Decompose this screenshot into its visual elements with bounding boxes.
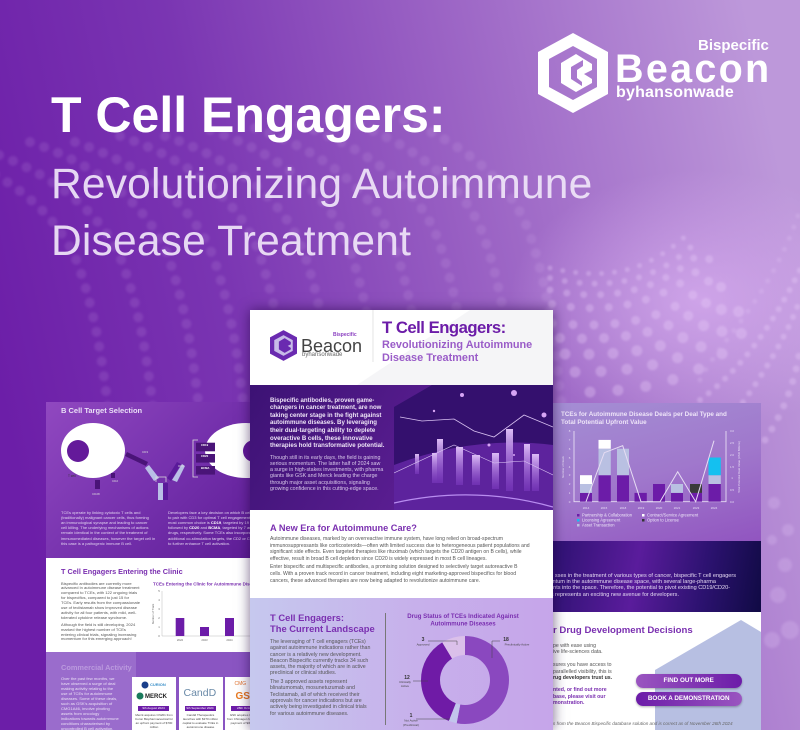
- heading: The Current Landscape: [270, 622, 375, 634]
- text: rug developers trust us. nted, or find out more: [553, 675, 612, 693]
- stacked bar chart with line: 0.0: [730, 500, 734, 504]
- logo: Bispecific Beacon by hansonwade: byhansonwade: [616, 84, 734, 101]
- stacked bar chart with line: 0: [569, 500, 571, 504]
- text: marked the highest number of TCEs: [61, 627, 126, 632]
- lead text: changers in cancer treatment, are now: [270, 404, 381, 411]
- panel: B cell target selection: [46, 402, 252, 558]
- text: preclinical or clinical studies. The 3 approved assets represent: [270, 670, 347, 685]
- panel: B cell target selection: CD3: [142, 450, 148, 454]
- bar chart: 0: [158, 634, 160, 638]
- subtitle: Disease Treatment: [382, 352, 478, 364]
- text: Teclistamab, all of which received their: [270, 692, 360, 698]
- panel: B cell target selection: CD28: [92, 492, 100, 496]
- panel: deals chart: [553, 403, 761, 541]
- body text: Though still in its early days, the field is gaining: [270, 454, 380, 460]
- icon: hexagon: [270, 330, 297, 361]
- panel: B cell target selection: CD20: [201, 454, 208, 458]
- body text: serious momentum. The latter half of 2024 saw: [270, 461, 380, 467]
- subtitle: [382, 339, 532, 364]
- deal card 1: Merck acquires CN201 from Curon Biopharmaceutical for an upfront payment of $700 million: [135, 712, 173, 728]
- logo: Bispecific: [333, 332, 357, 338]
- text: use of teclistamab show improved disease: [61, 605, 137, 610]
- hexagon decoration: [655, 620, 761, 730]
- stacked bar chart with line: Partnership & Collaboration: [582, 512, 633, 518]
- text: for various autoimmune diseases.: [270, 711, 348, 717]
- labels: T cell: [68, 474, 76, 478]
- stacked bar chart with line: 2.5: [730, 441, 734, 445]
- text: momentum for this emerging approach!: [61, 636, 132, 641]
- stacked bar chart with line: Total Potential Deal Value (USD Billions): [737, 441, 741, 493]
- callouts: [413, 641, 500, 719]
- panel: current landscape: [250, 598, 553, 730]
- text: diseases. Some of these deals,: [61, 696, 117, 700]
- deal card 1: [132, 677, 176, 730]
- panel: B cell target selection: CD19: [201, 442, 208, 446]
- subtitle: Revolutionizing Autoimmune: [51, 160, 592, 208]
- lead text: their dual-targeting ability to deplete: [270, 427, 375, 434]
- text: actively being investigated in clinical trials: [270, 704, 367, 710]
- logo: byhansonwade: [302, 352, 342, 358]
- document page: left: [46, 402, 252, 730]
- bar chart: 2022: [177, 638, 184, 642]
- wordmark: Bispecific: [698, 36, 769, 54]
- donut chart: drug status: 18: [503, 637, 509, 643]
- bar chart: 3: [158, 607, 160, 611]
- logo: Beacon: [301, 336, 362, 356]
- stacked bar chart with line: 3.0: [730, 429, 734, 433]
- donut chart: drug status: 12: [404, 675, 410, 681]
- document page: right: [553, 403, 761, 730]
- lead text: autoimmune diseases. By leveraging: [270, 419, 377, 426]
- button: book a demonstration: [636, 692, 742, 706]
- chart heading: Total Potential Upfront Value: [561, 418, 647, 426]
- stacked bar chart with line: 1: [569, 491, 571, 495]
- stacked bar chart with line: 6: [569, 447, 571, 451]
- text column 1: cell killing. The underlying mechanisms of actions: [61, 525, 149, 530]
- text: approvals for cancer indications but are: [270, 698, 362, 704]
- text: TCEs. Early results from the compassionate: [61, 600, 140, 605]
- title: T Cell Engagers:: [51, 87, 446, 143]
- logo: [270, 330, 362, 361]
- subtitle: Revolutionizing Autoimmune: [382, 339, 532, 351]
- text: conditions characterised by: [61, 720, 110, 726]
- icon: hexagon B mark: [538, 33, 608, 113]
- stacked bar chart with line: 2023: [693, 506, 700, 510]
- bar chart: [151, 582, 252, 642]
- bar chart: 1: [158, 625, 160, 629]
- donut chart: drug status: (Preclinical): [403, 723, 419, 727]
- footnote: s from the Beacon Bispecific database solution and is correct as of November 26th 2024: [553, 720, 733, 726]
- donut chart: drug status: Active: [401, 684, 409, 688]
- stacked bar chart with line: Asset Transaction: [582, 522, 615, 528]
- text: indications towards autoimmune: [61, 716, 119, 720]
- stacked bar chart with line: 2018: [620, 506, 627, 510]
- text: compared to TCEs, with 122 ongoing trials: [61, 590, 137, 595]
- donut chart: drug status: [399, 613, 530, 727]
- bar chart: 5: [158, 589, 160, 593]
- bar chart: Number of Trials: [151, 603, 155, 624]
- panel: dark image band: [553, 541, 761, 612]
- deal card 1: 9th August 2024: [142, 706, 165, 710]
- text: monstration.: [553, 700, 584, 706]
- bar chart: 2023: [201, 638, 208, 642]
- text: pe with ease using: [553, 643, 596, 649]
- bar chart: 2: [158, 616, 160, 620]
- stacked bar chart with line: 2015: [601, 506, 608, 510]
- body text: through major asset acquisitions, signaling: [270, 480, 370, 486]
- text: Beacon Bispecific currently tracks 34 such: [270, 658, 368, 664]
- text: base, please visit our: [553, 694, 605, 700]
- text column 2: drugs, respectively. Some TCEs also incorporate: [168, 530, 252, 535]
- paragraphs: Autoimmune diseases, marked by an overreactive immune system, have long relied on broad-spectrum: [270, 536, 503, 542]
- heading: T Cell Engagers Entering the Clinic: [61, 567, 183, 576]
- panel: dark image band: ntum in the autoimmune disease space, with several large-pharma: [553, 579, 716, 585]
- panel: a new era: [250, 510, 553, 598]
- panel: dark image band: ents into the space. Therefore, the potential to pivot existing CD19/CD20-: [553, 585, 730, 591]
- body text: giants like GSK and Merck leading the charge: [270, 473, 377, 479]
- text column 1: remain identical in the context of the treatment of: [61, 530, 148, 535]
- text: for bispecifics, compared to just 15 for: [61, 595, 129, 600]
- stacked bar chart with line: 2021: [674, 506, 681, 510]
- subtitle: [51, 160, 592, 264]
- stacked bar chart with line: 1: [731, 476, 733, 480]
- text: ive life-sciences data. sures you have access to: [553, 649, 612, 668]
- text: parallelled visibility, this is: [553, 669, 612, 675]
- paragraphs: [270, 536, 530, 584]
- text column 1: this case is a pathogenic immune B cell.: [61, 541, 132, 546]
- text column 1: (traditionally) malignant cancer cells, thus forming: [61, 515, 149, 520]
- text: entering clinical trials, signaling increasing: [61, 632, 136, 637]
- stacked bar chart with line: 2020: [656, 506, 663, 510]
- text column 2: [168, 510, 252, 546]
- deal card 3: [224, 677, 268, 730]
- lead text: [270, 396, 384, 449]
- donut chart: drug status: Preclinically Active: [505, 642, 530, 646]
- body text: a surge in high-stakes investments, with pharma: [270, 467, 383, 473]
- stacked bar chart with line: 1.5: [730, 465, 734, 469]
- donut chart: drug status: 1: [410, 713, 413, 719]
- lead text: therapies hold transformative potential.: [270, 442, 384, 449]
- text: advanced in autoimmune disease treatment: [61, 585, 140, 590]
- deal card 2: Candid Therapeutics launches with $370 million capital to evaluate TCEs in autoimmune disease: [183, 712, 218, 728]
- donut chart: drug status: Clinically: [399, 680, 411, 684]
- donut chart: drug status: Not Active: [404, 718, 418, 722]
- heading: [270, 612, 375, 634]
- deal card 1: CURION: [150, 682, 166, 687]
- deal card 2: [178, 677, 222, 730]
- donut chart: drug status: 3: [422, 637, 425, 643]
- segments: [430, 646, 500, 714]
- text: [553, 643, 612, 706]
- stacked bar chart with line: 3: [569, 473, 571, 477]
- chart title: Drug Status of TCEs Indicated Against: [407, 613, 519, 620]
- paragraphs: cancers, these advanced therapies are now being adapted to revolutionize autoimmune care.: [270, 578, 480, 584]
- text: have observed a surge of deal: [61, 680, 115, 686]
- stacked bar chart with line: Option to License: [647, 518, 680, 522]
- text: tolerated cytokine release syndrome. Although the field is still developing, 2024: [61, 615, 135, 627]
- stacked bar chart with line: Licensing Agreement: [582, 518, 621, 522]
- panel: T cell engagers entering the clinic: [46, 558, 252, 652]
- text: Over the past few months, we: [61, 676, 115, 680]
- document page: center: [250, 310, 553, 730]
- text: CMG1A46, involve pivoting: [61, 706, 110, 710]
- stacked bar chart with line: Number of Deals: [561, 456, 565, 478]
- header: [250, 310, 553, 385]
- heading: Commercial Activity: [61, 663, 132, 672]
- paragraphs: significant side effects. Even targeted therapies like rituximab (which targets the CD20 antigen on B cells), while: [270, 549, 522, 555]
- paragraphs: cells. With a proven track record in cancer treatment, including eight marketing-approved bispecifics for blood: [270, 571, 516, 577]
- chart heading: [561, 411, 727, 426]
- button: find out more: FIND OUT MORE: [664, 677, 714, 684]
- deal card 1: MERCK: [145, 694, 167, 700]
- stacked bar chart with line: 2014: [583, 506, 590, 510]
- heading: B Cell Target Selection: [61, 406, 142, 415]
- text: assets from oncology: [61, 710, 99, 716]
- panel: dark image band: s represents an exciting new avenue for developers.: [553, 592, 679, 598]
- logo: Bispecific Beacon by hansonwade: Beacon: [615, 47, 772, 91]
- subtitle: Disease Treatment: [51, 218, 411, 264]
- donut chart: drug status: Autoimmune Diseases: [430, 620, 496, 628]
- stacked bar chart with line: 2.0: [730, 453, 734, 457]
- text: activity for all four patients, with mild, well-: [61, 610, 136, 615]
- body text: growing confidence in this cutting-edge space.: [270, 486, 379, 492]
- stacked bar chart with line: 7: [569, 438, 571, 442]
- heading: T Cell Engagers:: [270, 612, 344, 622]
- text column 2: to further enhance T cell activation.: [168, 541, 230, 546]
- text: making activity relating to the: [61, 686, 113, 690]
- deal card 3: CMG: [234, 681, 246, 687]
- text: such as GSK's acquisition of: [61, 700, 112, 706]
- text: The leveraging of T cell engagers (TCEs): [270, 639, 366, 645]
- text: cancer is a relatively new development.: [270, 652, 362, 658]
- chart heading: TCEs for Autoimmune Disease Deals per Deal Type and: [561, 411, 727, 418]
- divider: [384, 613, 386, 725]
- lead text: overactive B cells, these innovative: [270, 435, 373, 442]
- stacked bar chart with line: 8: [569, 429, 571, 433]
- text: sses in the treatment of various types of cancer, bispecific T cell engagers: [555, 572, 736, 578]
- text: [270, 639, 370, 717]
- stacked bar chart with line: 2019: [638, 506, 645, 510]
- heading: A New Era for Autoimmune Care?: [270, 522, 417, 532]
- stacked bar chart with line: 2024: [711, 506, 718, 510]
- body text: [270, 454, 384, 492]
- lead text: Bispecific antibodies, proven game-: [270, 396, 374, 404]
- text column 1: [61, 510, 155, 546]
- bar chart: 2024: [226, 638, 233, 642]
- text: blinatumomab, mosunetuzumab and: [270, 685, 355, 691]
- logo: Bispecific Beacon by hansonwade: [538, 33, 772, 113]
- stacked bar chart with line: 0.5: [730, 488, 734, 492]
- text column 1: immunomediated diseases, however the target cell in: [61, 536, 155, 541]
- stacked bar chart with line: [561, 429, 741, 528]
- lead text: taking center stage in the fight against: [270, 412, 381, 419]
- chart image: [394, 385, 553, 510]
- text: Bispecific antibodies are currently more: [61, 580, 132, 586]
- text: [61, 676, 119, 730]
- title: T Cell Engagers:: [382, 318, 506, 337]
- heading: r Drug Development Decisions: [553, 625, 693, 636]
- deal card 2: 9th September 2024: [186, 706, 214, 710]
- panel: intro banner: [250, 385, 553, 510]
- stacked bar chart with line: 5: [569, 456, 571, 460]
- text: use of TCEs for autoimmune: [61, 690, 112, 696]
- text: assets, the majority of which are in active: [270, 664, 366, 670]
- button: find out more: [636, 674, 742, 688]
- diagram: T cell and antibody: [61, 423, 250, 500]
- stacked bar chart with line: 2: [569, 482, 571, 486]
- stacked bar chart with line: Contract/Service Agreement: [647, 512, 699, 518]
- panel: B cell target selection: CD2: [112, 479, 118, 483]
- button: book a demonstration: BOOK A DEMONSTRATION: [648, 695, 730, 702]
- bar chart: 4: [158, 598, 160, 602]
- deal card 2: CandD: [184, 687, 216, 699]
- text: [61, 580, 140, 641]
- panel: B cell target selection: BCMA: [201, 466, 209, 470]
- panel: white CTA: [553, 612, 761, 730]
- stacked bar chart with line: 4: [569, 465, 571, 469]
- paragraphs: effective, result in broad B cell depletion since CD20 is widely expressed in most B cell lineages. Enter bispecific and multispecific antibodies, a promising solution designed to selectively target autoreactive B: [270, 556, 517, 570]
- text column 1: an immunological synapse and leading to cancer: [61, 520, 148, 525]
- text: against autoimmune indications rather than: [270, 645, 370, 651]
- paragraphs: immunosuppressants like corticosteroids—often with limited success due to heterogeneous patient populations and: [270, 543, 530, 549]
- text column 1: TCEs operate by linking cytotoxic T cells and: [61, 510, 140, 514]
- panel: commercial activity: [46, 652, 252, 730]
- donut chart: drug status: Approved: [417, 642, 430, 646]
